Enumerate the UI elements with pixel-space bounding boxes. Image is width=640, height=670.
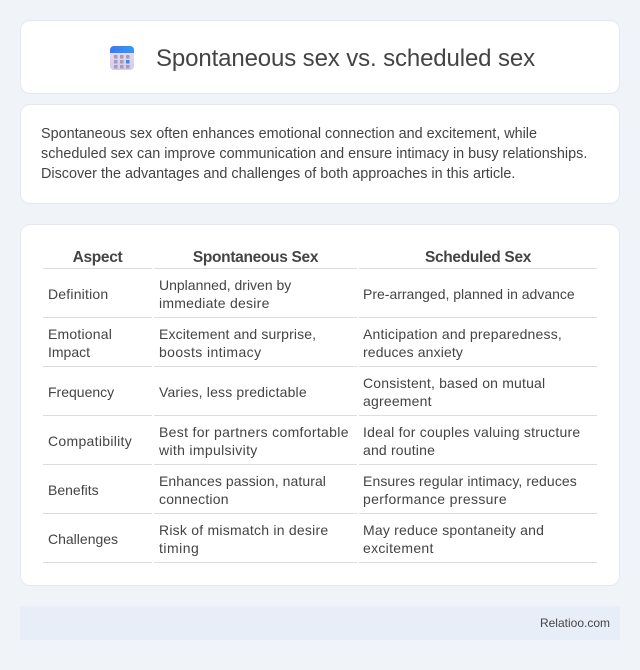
row: benefits: connection xyxy=(159,491,229,507)
intro card xyxy=(20,104,620,204)
row: challenges: excitement xyxy=(363,540,434,556)
title: Spontaneous sex vs. scheduled sex xyxy=(156,45,535,72)
intro text: scheduled sex can improve communication and ensure intimacy in busy relationships. xyxy=(41,146,587,162)
row: challenges xyxy=(48,522,544,556)
row: emotional impact: Anticipation and preparedness, xyxy=(363,326,562,342)
row: compatibility: Compatibility xyxy=(48,433,132,449)
table header: Scheduled Sex xyxy=(425,249,531,266)
row: compatibility: Best for partners comfortable xyxy=(159,424,349,440)
row: frequency xyxy=(48,375,545,409)
footer text: Relatioo.com xyxy=(540,616,610,630)
row: definition: Unplanned, driven by xyxy=(159,277,291,293)
row: frequency: agreement xyxy=(363,393,432,409)
row: compatibility xyxy=(48,424,580,458)
row: definition xyxy=(48,277,575,311)
row: benefits: Benefits xyxy=(48,482,99,498)
row: definition: Pre-arranged, planned in advance xyxy=(363,286,575,302)
intro text: Spontaneous sex often enhances emotional connection and excitement, while xyxy=(41,126,537,142)
row: frequency: Varies, less predictable xyxy=(159,384,307,400)
table header: Spontaneous Sex xyxy=(193,249,318,266)
intro text xyxy=(41,126,587,182)
row: definition: immediate desire xyxy=(159,295,270,311)
footer xyxy=(20,606,620,640)
row: compatibility: Ideal for couples valuing structure xyxy=(363,424,580,440)
row: compatibility: and routine xyxy=(363,442,435,458)
row: emotional impact: reduces anxiety xyxy=(363,344,463,360)
icon: calendar xyxy=(110,46,134,70)
title card xyxy=(20,20,620,94)
row: benefits: Enhances passion, natural xyxy=(159,473,326,489)
row: benefits: Ensures regular intimacy, reduces xyxy=(363,473,577,489)
row: emotional impact: boosts intimacy xyxy=(159,344,261,360)
row: compatibility: with impulsivity xyxy=(159,442,258,458)
row: frequency: Frequency xyxy=(48,384,114,400)
row: challenges: Challenges xyxy=(48,531,118,547)
row: emotional impact: Excitement and surprise, xyxy=(159,326,316,342)
row: challenges: May reduce spontaneity and xyxy=(363,522,544,538)
row: benefits: performance pressure xyxy=(363,491,507,507)
table card xyxy=(20,224,620,586)
row: benefits xyxy=(48,473,577,507)
table header xyxy=(73,249,532,266)
table header: Aspect xyxy=(73,249,122,266)
intro text: Discover the advantages and challenges of both approaches in this article. xyxy=(41,166,515,182)
row: challenges: timing xyxy=(159,540,199,556)
row: emotional impact: Emotional xyxy=(48,326,112,342)
row: emotional impact: Impact xyxy=(48,344,90,360)
row: definition: Definition xyxy=(48,286,108,302)
row: emotional impact xyxy=(48,326,562,360)
row: frequency: Consistent, based on mutual xyxy=(363,375,545,391)
row: challenges: Risk of mismatch in desire xyxy=(159,522,328,538)
